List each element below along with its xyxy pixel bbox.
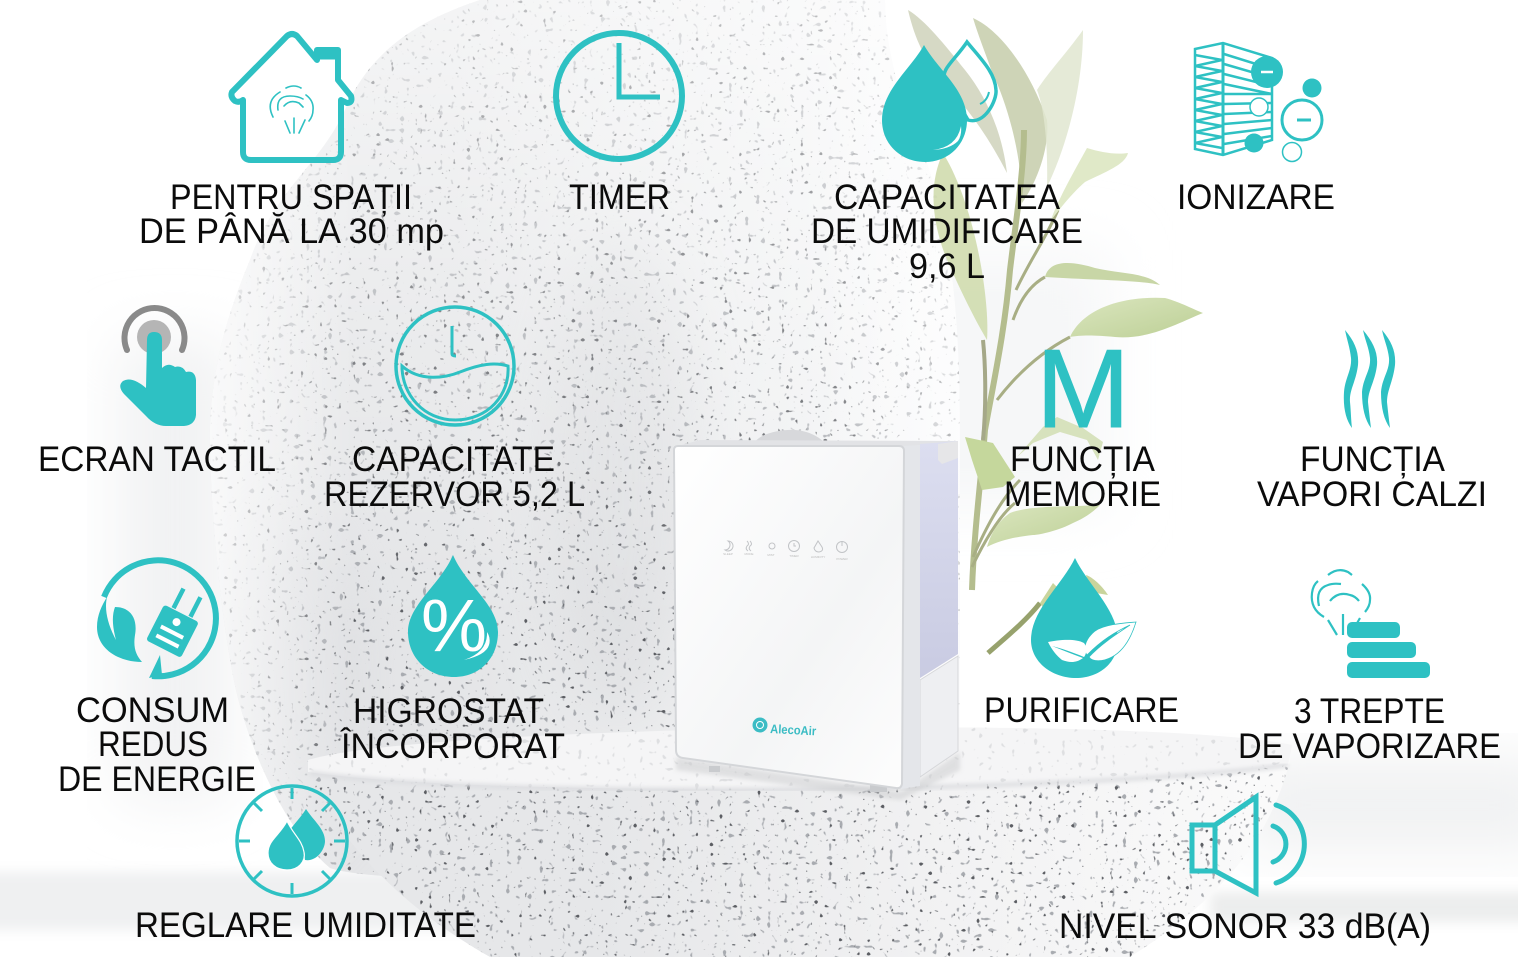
label: DE PÂNĂ LA 30 mp [139,212,444,251]
label: DE ENERGIE [58,760,256,799]
control icons: MIST [767,553,775,557]
icon: tank dial [396,307,514,425]
feature: humidity adjustment [135,786,476,945]
feature: low energy [58,560,256,799]
feature: humidification capacity [811,42,1083,286]
label: HIGROSTAT [353,692,544,731]
icon: letter M: M [1036,327,1130,451]
plant [908,10,1203,653]
feature: purification [984,558,1179,730]
control icons [723,540,848,561]
label [139,178,444,251]
side base [920,656,958,777]
handle [755,430,824,442]
feature: hygrostat [340,555,565,766]
front panel [674,446,904,788]
wide leaf [1070,298,1203,337]
feature: 3 steam levels [1238,570,1501,766]
lower wide leaf [987,505,1100,547]
control icons: HUMIDITY [811,555,825,559]
plant stems [972,130,1024,590]
brand logo: AlecoAir [770,722,817,738]
label: ÎNCORPORAT [340,727,565,766]
icon: percent drop [408,555,498,677]
leaf upper left [908,10,1007,173]
stone backdrop [210,0,960,876]
side strip [901,445,920,789]
label [324,440,585,514]
label: CAPACITATE [352,440,555,479]
icon: drop with leaves [1031,558,1136,678]
label: REZERVOR 5,2 L [324,475,585,514]
feature: memory [1004,327,1161,514]
label: CAPACITATEA [834,178,1061,217]
top edge [674,440,958,448]
label: IONIZARE [1177,178,1335,217]
feature: touch screen [38,308,276,479]
label: NIVEL SONOR 33 dB(A) [1059,907,1431,946]
label: 3 TREPTE [1294,692,1445,731]
control icons: TIMER [789,554,799,558]
icon: house [231,34,352,160]
label: PURIFICARE [984,691,1179,730]
icon: ionizer [1195,43,1322,162]
label: 9,6 L [909,247,985,286]
label: ECRAN TACTIL [38,440,276,479]
lower left leaf [965,437,1015,490]
feature: room size [139,34,444,251]
pedestal top surface [308,727,1292,789]
product: humidifier [674,430,960,800]
icon: humidity dial [237,786,347,896]
leaf upper centre [973,18,1047,203]
feature: warm steam [1257,330,1487,514]
control icons: SLEEP [723,552,733,556]
pedestal bowl [300,720,1300,957]
icon: water drops [882,42,996,162]
label: FUNCȚIA [1300,440,1446,479]
leaf behind memory label [1017,417,1103,460]
label [1238,692,1501,766]
icon: plug and leaf [97,560,216,678]
leaf upper right [1037,30,1083,187]
icon: speaker [1192,797,1304,893]
label [1004,440,1161,514]
brand logo [752,718,817,738]
small leaf top right [1050,148,1128,222]
icon: steam waves [1344,330,1395,428]
feet [709,766,887,792]
feature: ionization [1177,43,1335,217]
label [340,692,565,766]
feature: tank capacity [324,307,585,514]
label: FUNCȚIA [1010,440,1156,479]
shadow [676,752,960,800]
narrow leaf [1045,263,1160,285]
icon: clock [556,33,682,159]
label: REDUS [98,725,208,764]
label: VAPORI CALZI [1257,475,1487,514]
leaf long left [933,153,987,340]
side tank [920,441,958,678]
icon: steam and bars [1312,570,1430,678]
control icons: POWER [836,557,848,561]
latch [938,441,958,464]
leaf behind purify drop [1040,575,1108,612]
label [811,178,1083,286]
label: MEMORIE [1004,475,1161,514]
icon: touch hand [120,308,196,426]
label: CONSUM [76,691,229,730]
label: TIMER [569,178,670,217]
label [1257,440,1487,514]
feature: noise level [1059,797,1431,946]
label: REGLARE UMIDITATE [135,906,476,945]
label: DE VAPORIZARE [1238,727,1501,766]
label [58,691,256,799]
label: DE UMIDIFICARE [811,212,1083,251]
feature: timer [556,33,682,217]
control icons: MODE [744,552,754,556]
label: PENTRU SPAȚII [170,178,412,217]
icon: percent drop: % [421,584,487,667]
